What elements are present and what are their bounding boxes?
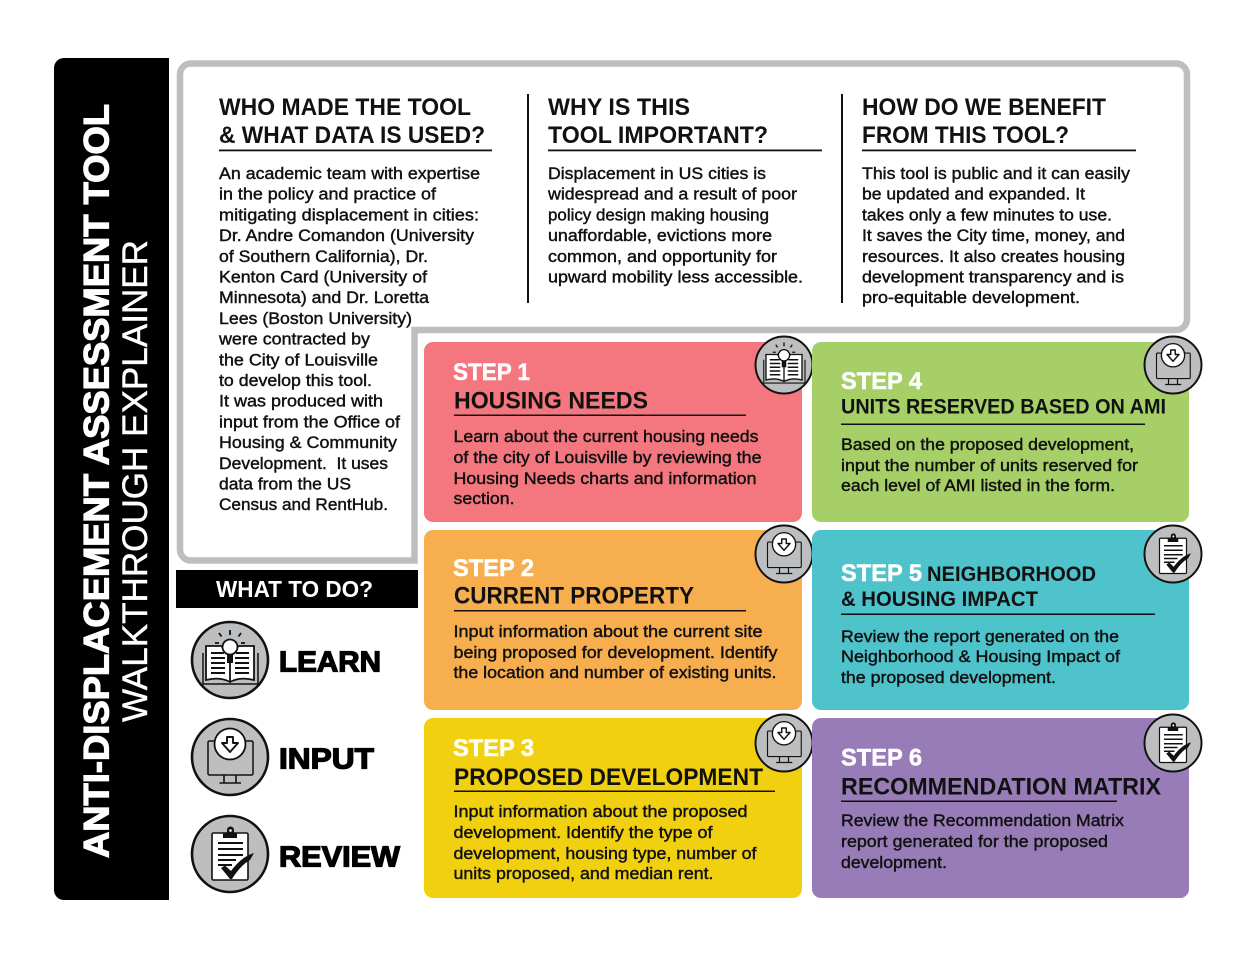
text block: why is this tool important: Displacement in US cities is — [548, 165, 766, 183]
panel: step 3 proposed development — [424, 714, 812, 898]
heading: what to do: WHAT TO DO? — [216, 576, 373, 602]
text block: who made the tool: the City of Louisville — [219, 351, 378, 369]
text block: who made the tool: Lees (Boston University) — [219, 310, 412, 328]
text block: who made the tool — [218, 165, 480, 514]
step title: CURRENT PROPERTY — [454, 582, 694, 610]
heading: how do we benefit: HOW DO WE BENEFIT — [862, 94, 1106, 121]
step description: Housing Needs charts and information — [454, 470, 756, 488]
heading: who made the tool: & WHAT DATA IS USED? — [219, 122, 485, 149]
text block: who made the tool: Kenton Card (University of — [219, 268, 427, 286]
icon: input — [756, 526, 812, 582]
step description: units proposed, and median rent. — [454, 865, 714, 883]
text block: why is this tool important: policy design making housing — [548, 206, 769, 224]
text block: how do we benefit — [862, 165, 1131, 307]
panel: what to do legend — [176, 570, 418, 892]
column: how do we benefit — [862, 94, 1136, 307]
heading: who made the tool: WHO MADE THE TOOL — [219, 94, 471, 121]
step description — [454, 623, 778, 682]
step description: report generated for the proposed — [841, 833, 1108, 851]
step description: each level of AMI listed in the form. — [841, 477, 1115, 495]
step title: UNITS RESERVED BASED ON AMI — [841, 396, 1166, 418]
text block: who made the tool: Census and RentHub. — [219, 496, 388, 514]
text block: who made the tool: It was produced with — [219, 393, 383, 411]
step description: development. Identify the type of — [454, 824, 713, 842]
step description: the proposed development. — [841, 669, 1056, 687]
step title: PROPOSED DEVELOPMENT — [454, 764, 763, 791]
text block: who made the tool: input from the Office of — [219, 413, 400, 431]
step label: STEP 6 — [841, 744, 922, 772]
text block: why is this tool important: widespread and a result of poor — [547, 186, 798, 204]
heading: why is this tool important: TOOL IMPORTANT? — [548, 122, 768, 149]
text block: how do we benefit: pro-equitable development. — [862, 289, 1080, 307]
step label: STEP 5 — [841, 560, 922, 587]
icon: review — [192, 816, 268, 892]
label: learn: LEARN — [279, 646, 381, 678]
icon: learn — [756, 336, 812, 394]
icon: input — [1144, 336, 1202, 394]
text block: who made the tool: Minnesota) and Dr. Loretta — [219, 289, 430, 307]
step description — [841, 436, 1139, 495]
text block: who made the tool: Housing & Community — [219, 434, 398, 452]
step description: Input information about the current site — [454, 623, 762, 641]
icon: learn — [192, 622, 268, 698]
step description: Neighborhood & Housing Impact of — [841, 648, 1120, 666]
step label: STEP 4 — [841, 368, 923, 395]
text block: who made the tool: Dr. Andre Comandon (University — [219, 227, 475, 245]
panel: step 4 units reserved — [812, 336, 1202, 522]
step description: Based on the proposed development, — [841, 436, 1134, 454]
step description — [454, 803, 757, 883]
step description: development. — [841, 854, 947, 872]
step title: & HOUSING IMPACT — [841, 587, 1038, 611]
icon: review — [1144, 714, 1202, 772]
heading: what to do — [176, 570, 418, 608]
step label: STEP 3 — [453, 735, 534, 762]
heading: who made the tool — [219, 94, 485, 149]
text block: why is this tool important: unaffordable, evictions more — [548, 227, 772, 245]
step description — [841, 628, 1120, 687]
text block: why is this tool important: upward mobility less accessible. — [548, 268, 803, 286]
text block: who made the tool: mitigating displacement in cities: — [219, 206, 479, 224]
icon: review — [1144, 526, 1202, 582]
label: review: REVIEW — [279, 842, 401, 874]
text block: who made the tool: were contracted by — [218, 331, 371, 349]
step description: being proposed for development. Identify — [454, 644, 778, 662]
text block: how do we benefit: takes only a few minutes to use. — [862, 206, 1112, 224]
text block: how do we benefit: It saves the City time, money, and — [862, 227, 1125, 245]
step description: the location and number of existing units. — [454, 664, 776, 682]
step description: Review the report generated on the — [841, 628, 1119, 646]
text block: who made the tool: to develop this tool. — [219, 372, 372, 390]
step description: Input information about the proposed — [454, 803, 748, 821]
text block: why is this tool important: common, and opportunity for — [548, 248, 778, 266]
step description: Learn about the current housing needs — [454, 428, 758, 446]
label: input: INPUT — [279, 744, 374, 776]
step description: of the city of Louisville by reviewing the — [454, 449, 762, 467]
subtitle: Walkthrough Explainer: WALKTHROUGH EXPLAINER — [116, 240, 155, 722]
heading: how do we benefit: FROM THIS TOOL? — [862, 122, 1069, 149]
icon: input — [756, 714, 812, 772]
panel: step 6 recommendation matrix — [812, 714, 1202, 898]
step description — [454, 428, 762, 508]
heading: why is this tool important: WHY IS THIS — [548, 94, 690, 121]
text block: how do we benefit: be updated and expanded. It — [862, 186, 1085, 204]
step description — [841, 812, 1125, 872]
step label: STEP 1 — [453, 359, 530, 386]
panel: information outline — [180, 64, 1187, 560]
step title: RECOMMENDATION MATRIX — [841, 774, 1161, 800]
text block: who made the tool: data from the US — [219, 476, 351, 494]
step title: NEIGHBORHOOD — [927, 562, 1096, 586]
heading: why is this tool important — [548, 94, 768, 149]
text block: why is this tool important — [547, 165, 803, 286]
text block: who made the tool: Development. It uses — [219, 455, 388, 473]
title: Anti-Displacement Assessment Tool: ANTI-DISPLACEMENT ASSESSMENT TOOL — [76, 104, 116, 858]
icon: input — [192, 719, 268, 795]
step description: development, housing type, number of — [454, 845, 757, 863]
step title: HOUSING NEEDS — [454, 388, 648, 414]
step description: Review the Recommendation Matrix — [841, 812, 1125, 830]
step label: STEP 2 — [453, 555, 534, 582]
text block: how do we benefit: resources. It also creates housing — [862, 248, 1125, 266]
text block: how do we benefit: development transparency and is — [862, 268, 1124, 286]
sidebar black background — [54, 58, 169, 900]
text block: who made the tool: in the policy and practice of — [219, 186, 436, 204]
panel: step 1 housing needs — [424, 336, 812, 522]
text block: who made the tool: of Southern California), Dr. — [219, 248, 428, 266]
panel: step 2 current property — [424, 526, 812, 710]
step description: section. — [454, 490, 514, 508]
column: why is this tool important — [547, 94, 822, 286]
text block: how do we benefit: This tool is public and it can easily — [862, 165, 1131, 183]
panel: step 5 neighborhood and housing impact — [812, 526, 1202, 710]
step title — [841, 562, 1096, 611]
text block: who made the tool: An academic team with expertise — [219, 165, 480, 183]
column: who made the tool — [218, 94, 492, 514]
sidebar: tool title — [54, 58, 169, 900]
heading: how do we benefit — [862, 94, 1106, 149]
step description: input the number of units reserved for — [841, 457, 1139, 475]
